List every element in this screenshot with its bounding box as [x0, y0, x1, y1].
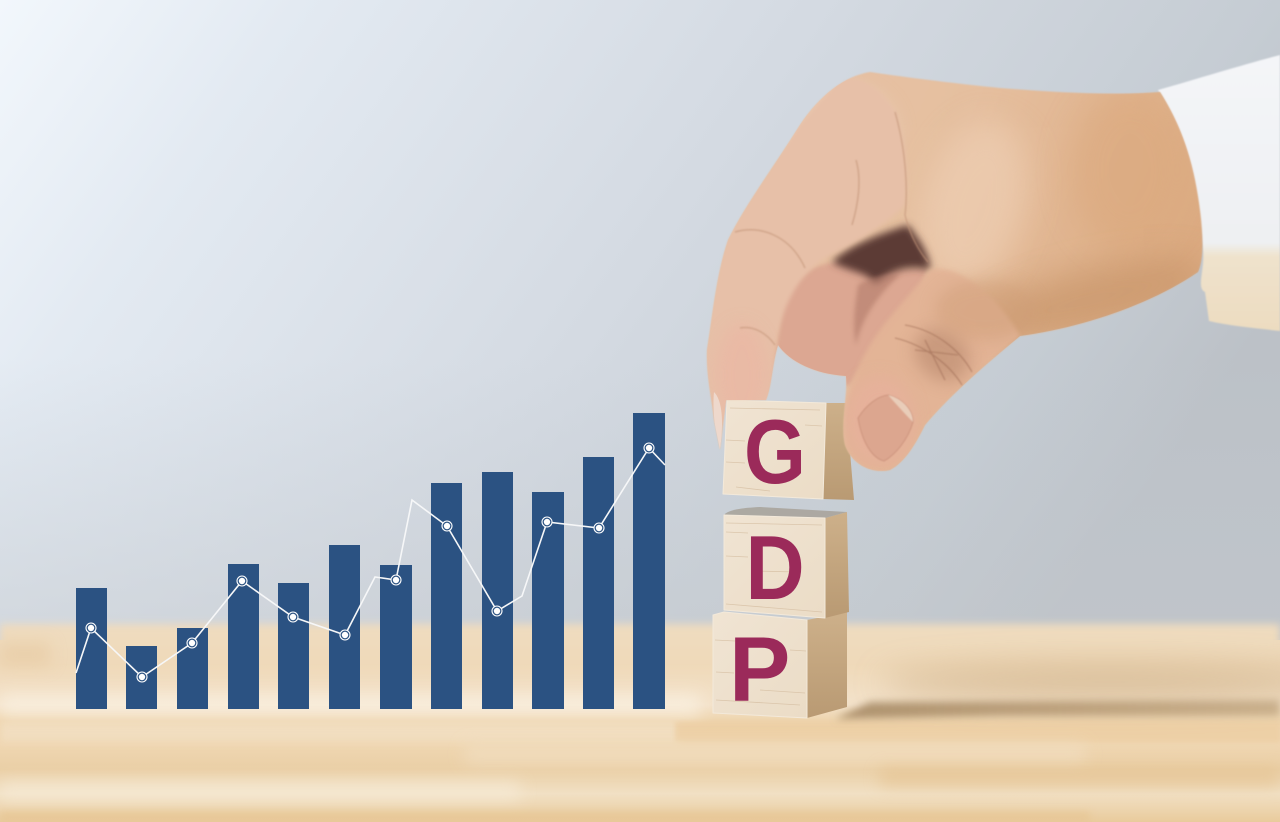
wood grain — [726, 408, 822, 491]
thumb — [845, 269, 1020, 471]
index finger body — [707, 79, 907, 425]
skin highlights and shading — [808, 92, 1202, 346]
wood grain — [726, 523, 822, 612]
wooden table — [0, 624, 1280, 822]
hand — [707, 72, 1214, 471]
thumb tip and knuckle shade — [911, 278, 1014, 385]
letter G: G — [744, 402, 806, 503]
thumb knuckle creases — [895, 325, 972, 385]
block: P — [713, 612, 847, 721]
bar chart — [76, 413, 665, 709]
knuckle creases — [735, 112, 928, 345]
block: D — [724, 507, 849, 619]
block: G — [723, 400, 854, 503]
shirt cuff — [1158, 55, 1280, 331]
trend line — [76, 448, 665, 677]
letter D: D — [746, 518, 805, 619]
gap between fingers — [832, 225, 930, 284]
thumbnail — [858, 395, 913, 461]
wood grain — [715, 640, 806, 705]
fingertip pink — [716, 323, 768, 427]
block cast shadow — [835, 700, 1280, 719]
middle finger split — [854, 274, 900, 345]
background wall — [0, 0, 1280, 650]
index fingernail — [713, 392, 722, 450]
curled fingers — [774, 262, 926, 386]
bars — [76, 413, 665, 709]
data point markers — [86, 443, 654, 682]
letter P: P — [729, 619, 790, 721]
